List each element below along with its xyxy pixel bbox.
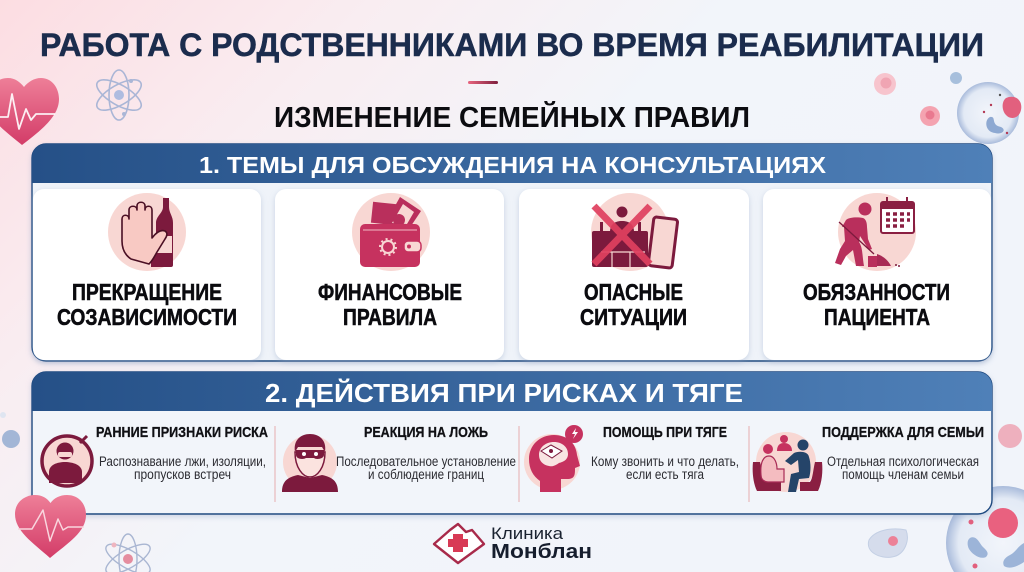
icon: crossed bar and phone [591,193,678,271]
label: ОПАСНЫЕ [584,279,683,305]
text: если есть тяга [626,467,704,482]
panel header 2: 2. ДЕЙСТВИЯ ПРИ РИСКАХ И ТЯГЕ [265,378,743,408]
label: СОЗАВИСИМОСТИ [57,304,237,330]
icon: family counselling [753,432,822,492]
logo [434,524,592,563]
icon: sweeping person and calendar [835,193,916,271]
label: СИТУАЦИИ [580,304,687,330]
label: ПРЕКРАЩЕНИЕ [72,279,222,305]
icon: masked person in prohibition circle [42,436,92,486]
icon: atom top [92,70,146,120]
text [336,424,516,482]
subtitle: ИЗМЕНЕНИЕ СЕМЕЙНЫХ ПРАВИЛ [274,100,750,134]
label: ОБЯЗАННОСТИ [803,279,950,305]
text: и соблюдение границ [368,467,484,482]
text: РАННИЕ ПРИЗНАКИ РИСКА [96,424,268,441]
panel header 1: 1. ТЕМЫ ДЛЯ ОБСУЖДЕНИЯ НА КОНСУЛЬТАЦИЯХ [199,152,826,178]
label [803,279,950,330]
text: помощь членам семьи [842,467,964,482]
text [822,424,984,482]
label: ПРАВИЛА [343,304,437,330]
logo: Монблан [491,541,592,563]
accent line [468,81,498,84]
text: Последовательное установление [336,454,516,469]
text: Кому звонить и что делать, [591,454,739,469]
title: РАБОТА С РОДСТВЕННИКАМИ ВО ВРЕМЯ РЕАБИЛИТАЦИИ [40,27,984,63]
icon: head with alert bubble [524,425,583,492]
card: финансовые правила [275,189,504,360]
card: обязанности пациента [763,189,991,360]
text [591,424,739,482]
logo: Клиника [491,524,564,543]
icon: wallet with money [352,193,430,271]
icon: large cell bottom right [946,486,1024,572]
card: опасные ситуации [519,189,749,360]
decorative cells top right [874,72,1021,144]
text: ПОДДЕРЖКА ДЛЯ СЕМЬИ [822,424,984,441]
item: помощь при тяге [524,424,739,492]
text: Распознавание лжи, изоляции, [99,454,266,469]
text [96,424,268,482]
item: реакция на ложь [282,424,516,492]
text: РЕАКЦИЯ НА ЛОЖЬ [364,424,488,441]
panel header 1 [32,144,992,183]
text: пропусков встреч [134,467,231,482]
decorative side dots [0,412,1022,448]
panel header 2 [32,372,992,411]
text: Отдельная психологическая [827,454,979,469]
label: ФИНАНСОВЫЕ [318,279,462,305]
label: ПАЦИЕНТА [824,304,930,330]
item: поддержка для семьи [753,424,984,492]
icon: masked man [282,434,338,492]
item: ранние признаки риска [42,424,268,486]
icon: hand and bottle [108,193,186,271]
icon: heart bottom left [15,495,86,558]
label [318,279,462,330]
icon: heart top left [0,78,59,145]
icon: atom bottom [102,534,154,572]
icon: clinic mountain cross [434,524,484,563]
label [580,279,687,330]
card: прекращение созависимости [33,189,261,360]
label [57,279,237,330]
icon: small cell bottom [868,529,907,557]
panel: действия при рисках и тяге [32,372,992,514]
text: ПОМОЩЬ ПРИ ТЯГЕ [603,424,727,441]
panel: темы для обсуждения [32,144,992,361]
